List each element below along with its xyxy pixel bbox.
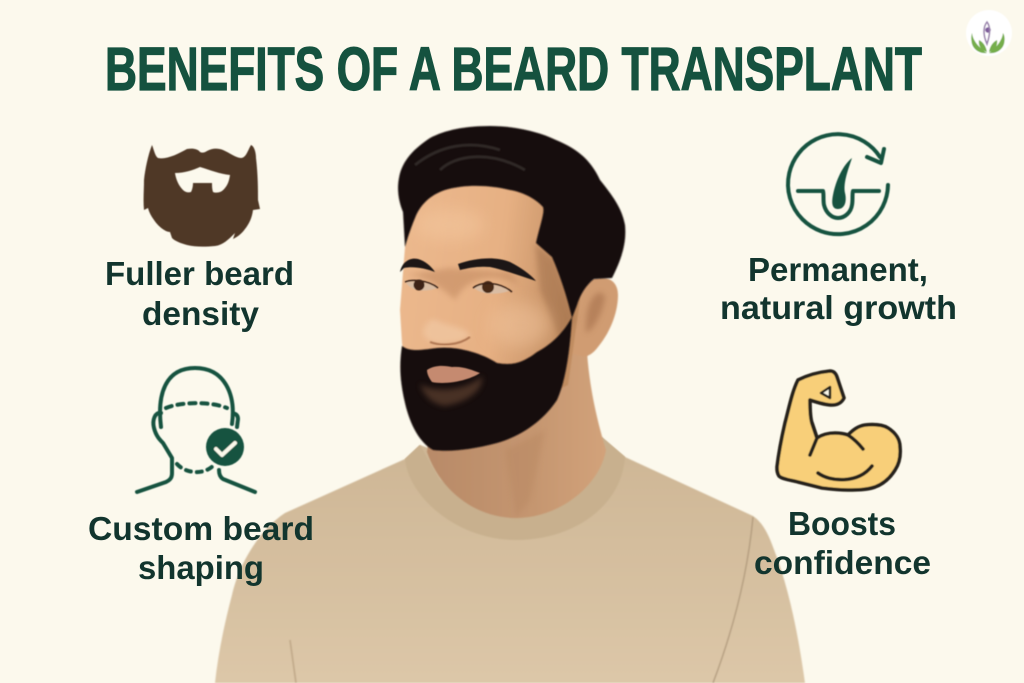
item: fuller beard density: [105, 145, 294, 332]
shirt collar: [405, 437, 625, 540]
item: custom beard shaping: [88, 368, 314, 586]
icon: flexed bicep: [777, 371, 900, 490]
eye left: [405, 280, 438, 291]
label: custom beard shaping: Custom beard: [88, 510, 314, 547]
shirt: [215, 437, 805, 683]
eyebrow right: [458, 258, 536, 281]
label: fuller beard density: Fuller beard: [105, 255, 294, 292]
hair: [398, 126, 625, 318]
nose: [423, 320, 470, 344]
icon: face outline with check: [137, 368, 255, 492]
icon: beard: [144, 145, 260, 247]
photo: man with beard: [215, 126, 805, 683]
label: boosts confidence: [754, 505, 931, 581]
icon: hair follicle in cycle arrow: [788, 134, 888, 234]
lips: [427, 366, 480, 383]
eyebrow left: [400, 259, 435, 272]
beard: [400, 317, 572, 451]
label: boosts confidence: Boosts: [788, 505, 896, 542]
label: custom beard shaping: shaping: [138, 549, 264, 586]
label: fuller beard density: [105, 255, 294, 332]
eye right: [473, 281, 512, 294]
label: custom beard shaping: [88, 510, 314, 586]
label: permanent natural growth: [720, 251, 957, 326]
label: permanent natural growth: Permanent,: [748, 251, 928, 288]
ear: [565, 278, 618, 357]
face: [400, 170, 580, 440]
neck: [427, 340, 606, 518]
logo: [966, 10, 1012, 56]
eye socket shade: [405, 268, 520, 300]
label: boosts confidence: confidence: [754, 544, 931, 581]
label: permanent natural growth: natural growth: [720, 289, 957, 326]
label: fuller beard density: density: [142, 295, 260, 332]
chin stubble patch: [420, 376, 482, 406]
item: permanent natural growth: [720, 134, 957, 326]
item: boosts confidence: [754, 371, 931, 581]
